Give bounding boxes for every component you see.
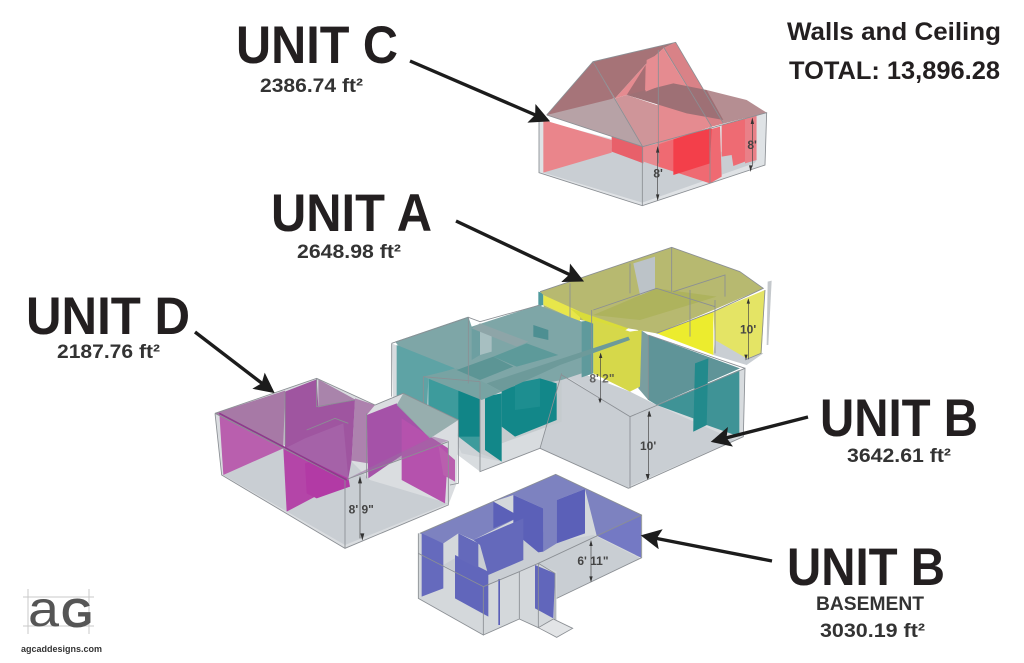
diagram: unit D purple model [215,378,458,548]
arrow: unit D [195,332,272,391]
arrow: unit B [714,417,808,441]
label: unit B basement: UNIT B [787,538,945,597]
label: unit C: UNIT C [236,16,398,75]
title: walls and ceiling total [787,18,1001,85]
arrow: unit A [456,221,581,280]
label: unit B basement: 3030.19 ft² [820,621,925,642]
label: unit A: UNIT A [271,184,432,243]
logo: agcaddesigns: G [61,590,93,636]
label: unit B: 3642.61 ft² [847,446,951,467]
diagram: unit B teal model [392,305,745,488]
logo: agcaddesigns [21,581,102,655]
label: unit B basement [787,538,945,642]
diagram: unit A yellow model [538,247,772,417]
label: unit D: UNIT D [26,287,190,346]
diagram: unit C red model with roof: 8' [653,166,663,180]
label: unit A: 2648.98 ft² [297,242,401,263]
logo: agcaddesigns: a [28,581,59,637]
diagram: unit C red model with roof [539,42,767,206]
label: unit C: 2386.74 ft² [260,76,363,97]
diagram: unit D purple model: 8' 9" [349,502,374,516]
label: unit B basement: BASEMENT [816,594,924,615]
label: unit D: 2187.76 ft² [57,342,160,363]
diagram: unit A yellow model: 10' [740,322,756,336]
logo: agcaddesigns: agcaddesigns.com [21,644,102,655]
label: unit B: UNIT B [820,389,978,448]
title: walls and ceiling total: TOTAL: 13,896.28 [789,57,1000,85]
diagram: basement blue model: 6' 11" [577,554,609,568]
arrow: unit C [410,61,547,120]
diagram: unit C red model with roof: 8' [747,138,757,152]
diagram: unit B teal model: 8' 2" [589,372,615,386]
arrow: unit B basement [644,536,772,561]
label: unit C [236,16,398,97]
label: unit B [820,389,978,467]
diagram: basement blue model [418,474,642,637]
diagram: unit B teal model: 10' [640,439,656,453]
title: walls and ceiling total: Walls and Ceiling [787,18,1001,46]
